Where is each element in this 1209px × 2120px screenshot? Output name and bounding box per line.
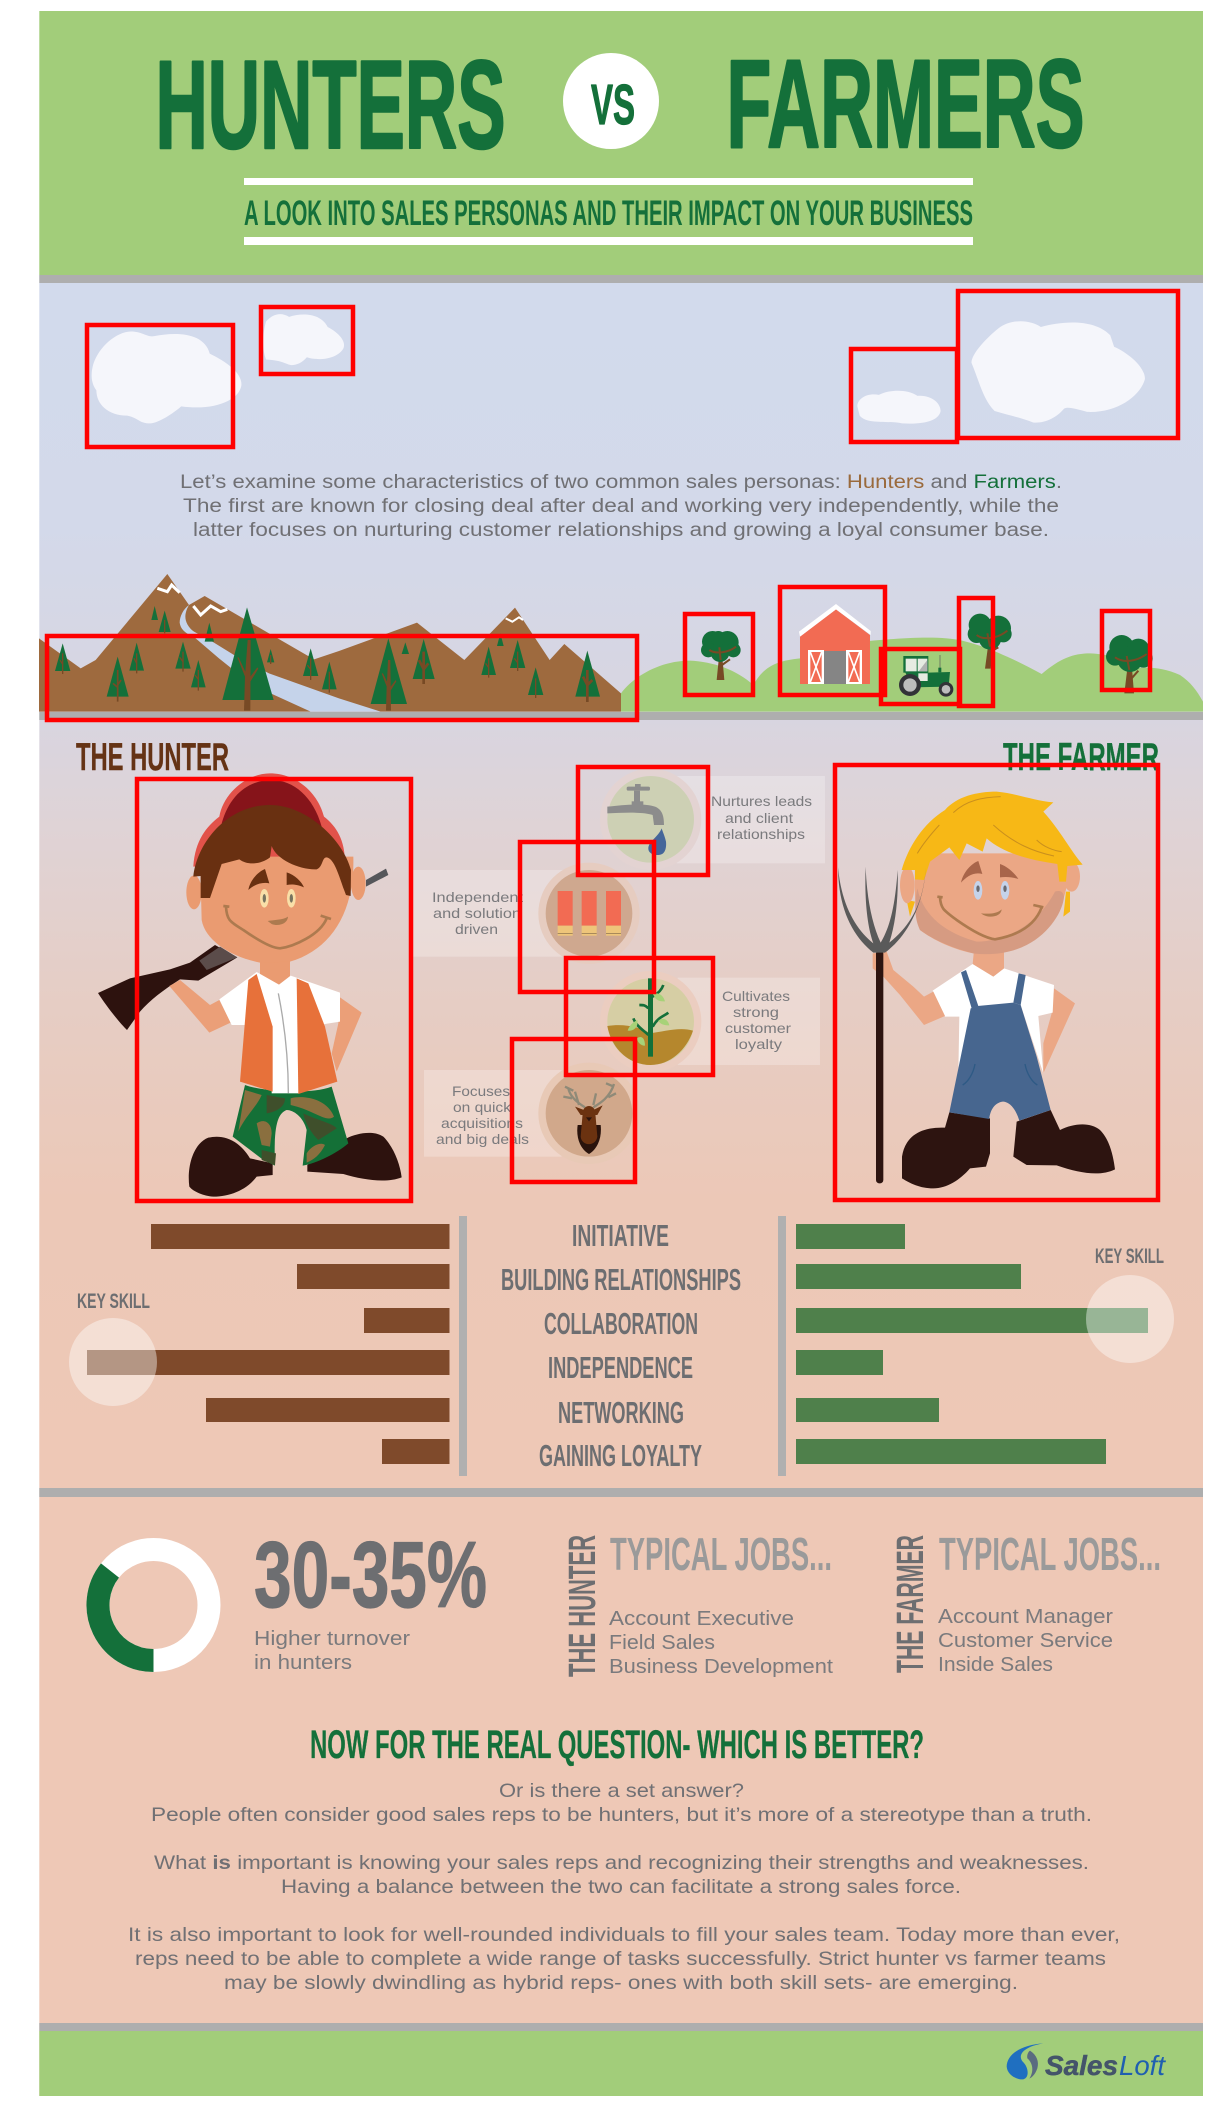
icon: tree three bbox=[1106, 635, 1153, 693]
text: nurtures leads: and client bbox=[725, 810, 793, 826]
intro text: The first are known for closing deal after deal and working very independently, while the bbox=[183, 496, 1059, 517]
subtitle with rules bbox=[244, 178, 973, 245]
key skill marker: hunter bbox=[69, 1290, 157, 1406]
text: nurtures leads bbox=[711, 793, 812, 842]
bar chart: hunter skills bbox=[87, 1224, 450, 1464]
heading: hunter typical jobs: TYPICAL JOBS... bbox=[610, 1528, 832, 1580]
list: hunter jobs bbox=[609, 1608, 833, 1678]
text: focuses: acquisitions bbox=[441, 1115, 523, 1131]
illustration: farmer character bbox=[838, 792, 1115, 1188]
annotation boxes: red outlines bbox=[47, 291, 1178, 1201]
body text: conclusion: may be slowly dwindling as hybrid reps- ones with both skill sets- are emerging. bbox=[224, 1972, 1018, 1994]
text: independent: and solution bbox=[433, 905, 521, 921]
icon: cloud far right bbox=[971, 321, 1145, 423]
donut chart: turnover bbox=[98, 1550, 209, 1660]
callout: focuses bbox=[424, 1063, 640, 1164]
panel: header banner bbox=[39, 11, 1203, 275]
stat caption: Higher turnover bbox=[254, 1628, 410, 1650]
illustration: hunter character bbox=[98, 773, 402, 1197]
callout: nurtures leads bbox=[600, 769, 825, 870]
body text: conclusion: People often consider good sales reps to be hunters, but it’s more of a stereotype than a truth. bbox=[151, 1804, 1092, 1826]
body text: conclusion bbox=[128, 1780, 1120, 1994]
skill labels: INDEPENDENCE bbox=[548, 1350, 693, 1385]
icon: tractor bbox=[899, 655, 953, 697]
icon: cloud small left bbox=[263, 314, 344, 365]
panel: persona traits with icons bbox=[412, 769, 825, 1164]
vertical label: the farmer: THE FARMER bbox=[890, 1535, 932, 1673]
skill labels: BUILDING RELATIONSHIPS bbox=[501, 1262, 741, 1297]
intro text bbox=[180, 472, 1062, 541]
icon: tree two bbox=[968, 614, 1012, 669]
list: farmer jobs: Inside Sales bbox=[938, 1654, 1053, 1676]
skill labels: INITIATIVE bbox=[572, 1218, 669, 1253]
body text: conclusion: It is also important to look for well-rounded individuals to fill your sales team. Today more than ever, bbox=[128, 1924, 1120, 1946]
body text: conclusion: Or is there a set answer? bbox=[499, 1780, 744, 1802]
text: independent: Independent bbox=[432, 889, 523, 905]
text: cultivates: Cultivates bbox=[722, 988, 790, 1004]
stat caption bbox=[254, 1628, 410, 1674]
list: hunter jobs: Business Development bbox=[609, 1656, 833, 1678]
intro text: latter focuses on nurturing customer relationships and growing a loyal consumer base. bbox=[193, 520, 1049, 541]
icon: cloud small right bbox=[857, 391, 941, 424]
text: cultivates: strong bbox=[733, 1004, 779, 1020]
text: cultivates bbox=[722, 988, 791, 1052]
illustration: green hills bbox=[621, 638, 1203, 712]
callout: cultivates bbox=[600, 971, 820, 1072]
badge: vs: VS bbox=[591, 73, 635, 137]
list: hunter jobs: Account Executive bbox=[609, 1608, 794, 1630]
panel: footer bbox=[39, 2031, 1203, 2096]
text: nurtures leads: relationships bbox=[717, 826, 805, 842]
stat caption: in hunters bbox=[254, 1652, 352, 1674]
skill labels bbox=[501, 1218, 741, 1473]
logo: salesloft: Sales bbox=[1045, 2050, 1118, 2081]
text: focuses: on quick bbox=[453, 1099, 512, 1115]
text: independent: driven bbox=[455, 921, 498, 937]
body text: conclusion: reps need to be able to complete a wide range of tasks successfully. Strict hunter vs farmer teams bbox=[135, 1948, 1106, 1970]
list: hunter jobs: Field Sales bbox=[609, 1632, 715, 1654]
callout: independent bbox=[412, 863, 640, 964]
logo: salesloft bbox=[1007, 2043, 1166, 2081]
vertical label: the hunter: THE HUNTER bbox=[562, 1535, 604, 1677]
key skill marker: farmer bbox=[1086, 1245, 1174, 1363]
illustration: mountains with pine trees and river bbox=[39, 570, 621, 712]
text: independent bbox=[432, 889, 523, 937]
skill labels: GAINING LOYALTY bbox=[539, 1438, 702, 1473]
intro text: Let’s examine some characteristics of two common sales personas: Hunters and Farmers . bbox=[180, 472, 1062, 493]
text: focuses: and big deals bbox=[436, 1131, 529, 1147]
list: farmer jobs: Customer Service bbox=[938, 1630, 1113, 1652]
body text: conclusion: What is important is knowing your sales reps and recognizing their strengths and weaknesses. bbox=[154, 1852, 1089, 1874]
icon: barn bbox=[799, 604, 871, 684]
list: farmer jobs: Account Manager bbox=[938, 1606, 1113, 1628]
badge: vs bbox=[563, 53, 659, 149]
bar chart: farmer skills bbox=[796, 1224, 1148, 1464]
stat: 30-35%: 30-35% bbox=[254, 1522, 487, 1627]
title: hunters: HUNTERS bbox=[156, 36, 506, 175]
text: focuses: Focuses bbox=[452, 1083, 510, 1099]
key skill marker: farmer: KEY SKILL bbox=[1095, 1245, 1164, 1268]
list: farmer jobs bbox=[938, 1606, 1113, 1676]
text: focuses bbox=[436, 1083, 529, 1147]
skill labels: NETWORKING bbox=[558, 1395, 684, 1430]
logo: salesloft: Loft bbox=[1119, 2050, 1166, 2081]
skill labels: COLLABORATION bbox=[544, 1306, 698, 1341]
icon: cloud far left bbox=[92, 332, 241, 423]
icon: tree one bbox=[701, 631, 741, 680]
text: cultivates: customer bbox=[725, 1020, 791, 1036]
body text: conclusion: Having a balance between the two can facilitate a strong sales force. bbox=[281, 1876, 961, 1898]
text: nurtures leads: Nurtures leads bbox=[711, 793, 812, 809]
heading: the hunter: THE HUNTER bbox=[76, 736, 229, 779]
key skill marker: hunter: KEY SKILL bbox=[77, 1290, 150, 1313]
text: cultivates: loyalty bbox=[735, 1036, 782, 1052]
